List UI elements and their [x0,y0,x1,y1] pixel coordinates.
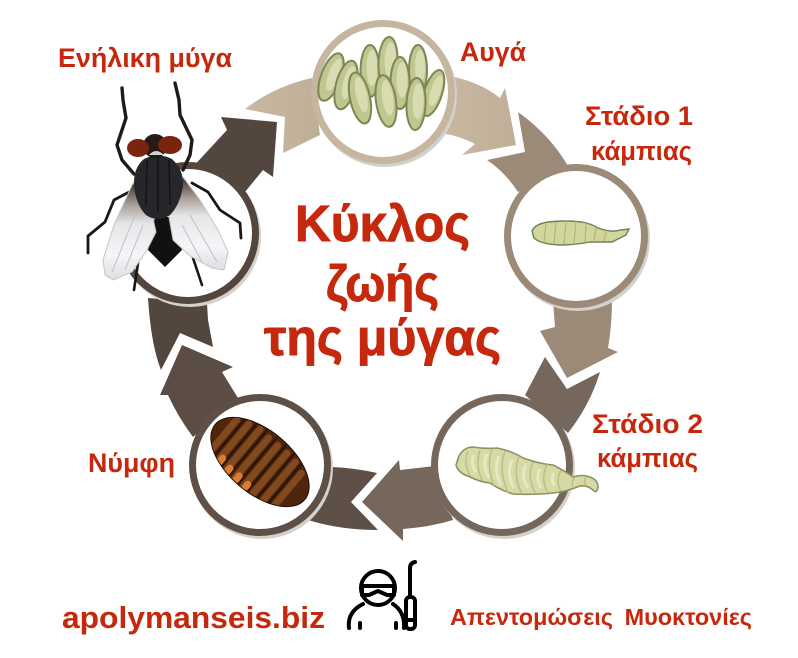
label: stage 1 larva [585,101,693,166]
arrow: pupa head [160,345,238,437]
panel: stage 2 larva circle [433,397,598,539]
icon: stage 2 larva [456,447,598,494]
arrow: stage 2 head [362,460,453,541]
icon: adult fly [88,83,241,290]
arrow: pupa tail [308,467,378,530]
label: stage 1 larva: Στάδιο 1 [585,101,693,131]
icon: eggs cluster [313,37,449,130]
label: eggs: Αυγά [460,37,526,67]
panel: pupa circle [191,397,333,539]
arrow: fly tail [148,298,213,370]
website footer text: apolymanseis.biz [62,600,325,635]
arrow: stage 1 head [540,300,618,378]
icon: pest control worker [349,562,415,629]
label: pupa: Νύμφη [88,448,175,478]
label: stage 2 larva [592,409,703,473]
arrow: eggs to stage 1 (head) [441,76,516,155]
icon: stage 1 larva [532,221,629,245]
arrow: fly head [190,117,277,192]
arrow: adult fly to eggs (tail) [245,78,320,153]
title: ζωής [326,255,439,312]
title: της μύγας [264,309,501,366]
arrow: stage 1 tail [487,112,568,192]
icon: pupa [210,416,310,508]
title: Κύκλος [295,195,470,252]
label: stage 2 larva: Στάδιο 2 [592,409,703,439]
label: stage 2 larva: κάμπιας [597,443,698,473]
title [264,195,501,366]
label: adult fly: Ενήλικη μύγα [58,43,232,73]
panel: adult fly circle [119,165,261,307]
panel: eggs circle [313,23,457,167]
services footer text: Απεντομώσεις Μυοκτονίες [450,604,752,630]
arrow: stage 2 tail [525,357,600,433]
label: stage 1 larva: κάμπιας [591,136,692,166]
panel: stage 1 larva circle [506,167,650,311]
